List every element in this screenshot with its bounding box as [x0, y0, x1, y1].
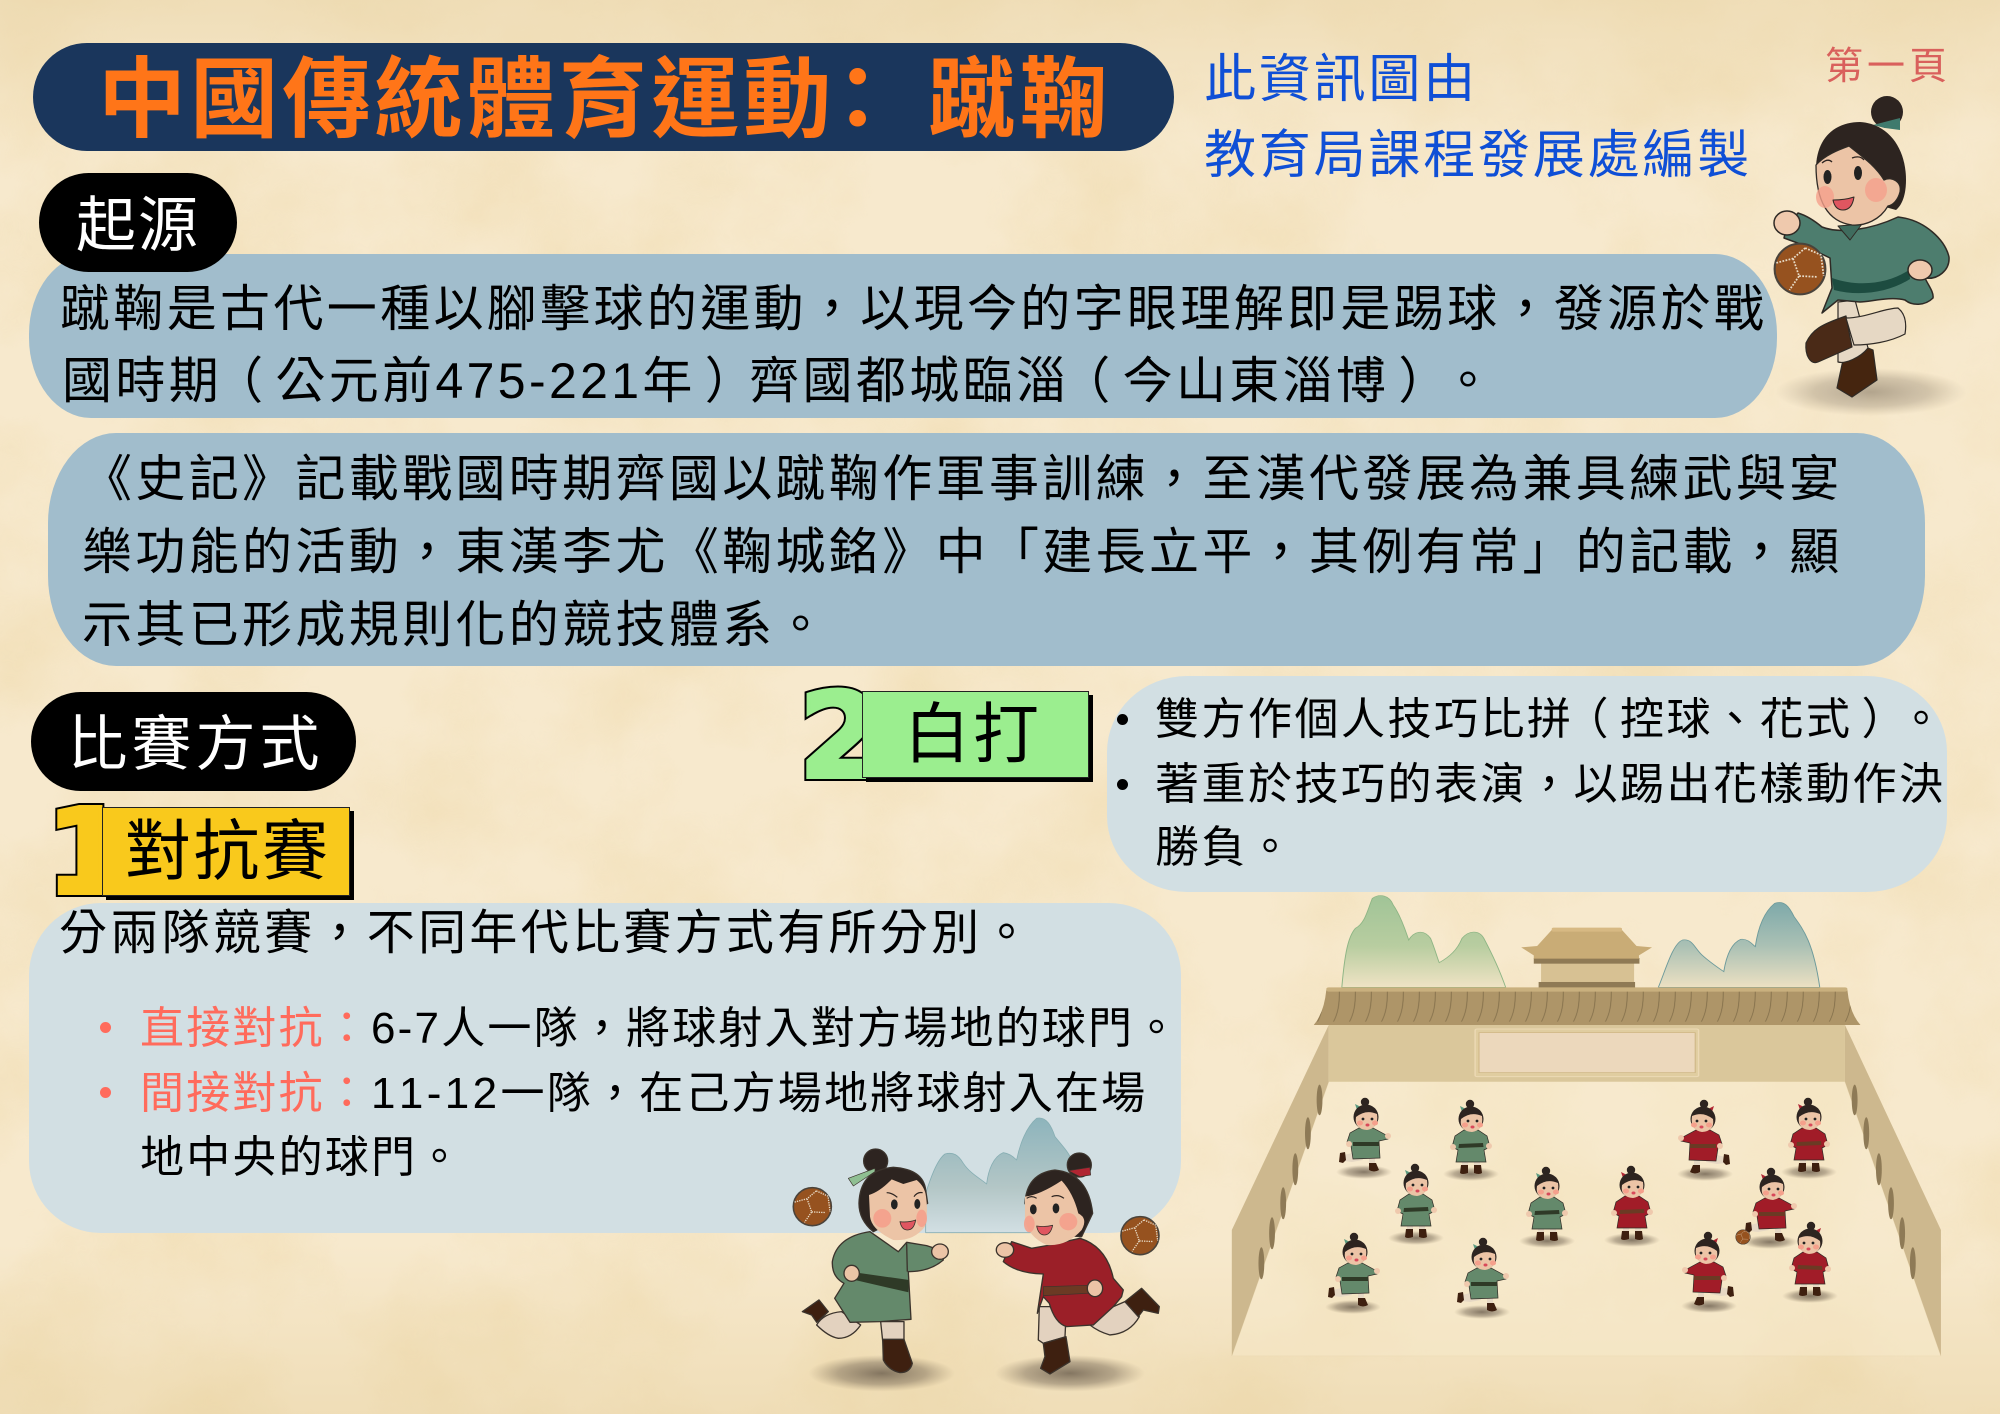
confrontation bullets: 直接對抗：6-7人一隊，將球射入對方場地的球門。: [140, 1004, 1180, 1053]
confrontation bullets: [100, 1004, 1180, 1182]
confrontation bullets: 地中央的球門。: [140, 1133, 463, 1182]
illustration: right shadow: [995, 1355, 1145, 1392]
illustration: green team: [1325, 1098, 1575, 1319]
origin text: 國時期（公元前475-221年）齊國都城臨淄（今山東淄博）。: [62, 353, 1496, 409]
confrontation intro text: 分兩隊競賽，不同年代比賽方式有所分別。: [59, 907, 1034, 960]
heading: origin: 起源: [76, 192, 200, 259]
badge: number 2: 2: [799, 667, 881, 805]
solo play bullets: 雙方作個人技巧比拼（控球、花式）。: [1155, 695, 1946, 744]
history text: 《史記》記載戰國時期齊國以蹴鞠作軍事訓練，至漢代發展為兼具練武與宴: [82, 451, 1843, 507]
panel: history: [48, 433, 1925, 666]
history text: 樂功能的活動，東漢李尤《鞠城銘》中「建長立平，其例有常」的記載，顯: [82, 524, 1843, 580]
heading: match formats: [31, 692, 356, 791]
subheading: solo play: [862, 691, 1089, 778]
illustration: kicking boy with ball: [1774, 96, 1967, 416]
title text: 中國傳統體育運動：蹴鞠: [98, 29, 1112, 156]
illustration: left ball: [793, 1188, 831, 1226]
history text: 示其已形成規則化的競技體系。: [82, 597, 829, 653]
credit text: 此資訊圖由: [1204, 51, 1478, 109]
illustration: green mountains: [1342, 896, 1506, 987]
illustration: right ball: [1121, 1217, 1159, 1255]
solo play bullets: 著重於技巧的表演，以踢出花樣動作決: [1155, 760, 1946, 809]
illustration: right wall: [1845, 1025, 1941, 1356]
illustration: left wall: [1232, 1025, 1329, 1356]
illustration: left shadow: [808, 1355, 955, 1392]
title banner: [33, 43, 1174, 151]
illustration: teal mountains: [926, 1118, 1082, 1233]
illustration: red player: [996, 1153, 1159, 1374]
panel: origin intro: [29, 254, 1777, 418]
panel: confrontation match: [29, 903, 1181, 1233]
illustration: wall niches: [1258, 1085, 1916, 1279]
subheading: confrontation match: [102, 807, 350, 896]
badge: number 1: 1: [46, 783, 128, 921]
illustration: court floor: [1232, 1082, 1941, 1356]
illustration: back wall: [1329, 1025, 1845, 1082]
origin text: [60, 281, 1767, 409]
badge: number 2: 2: [799, 667, 881, 805]
illustration: pavilion: [1521, 928, 1652, 988]
illustration: court with wall and pavilion: [1232, 896, 1941, 1356]
subheading: confrontation match: 對抗賽: [125, 814, 330, 888]
confrontation bullets: 間接對抗：11-12一隊，在己方場地將球射入在場: [140, 1069, 1147, 1118]
illustration: green player: [802, 1149, 948, 1373]
solo play bullets: [1117, 695, 1946, 872]
badge: number 1: 1: [46, 783, 128, 921]
origin text: 蹴鞠是古代一種以腳擊球的運動，以現今的字眼理解即是踢球，發源於戰: [60, 281, 1767, 337]
credit text: [1204, 51, 1752, 185]
illustration: plaque: [1475, 1029, 1699, 1077]
subheading: solo play: 白打: [904, 697, 1042, 771]
solo play bullets: 勝負。: [1155, 823, 1294, 872]
page label: 第一頁: [1825, 46, 1951, 88]
illustration: roof: [1314, 987, 1860, 1025]
illustration: red team: [1604, 1098, 1838, 1313]
heading: match formats: 比賽方式: [68, 711, 324, 778]
heading: origin: [39, 173, 237, 272]
illustration: teal court mountains: [1658, 902, 1820, 987]
panel: solo play: [1107, 676, 1947, 892]
illustration: two players in foreground: [793, 1118, 1159, 1392]
history text: [82, 451, 1843, 653]
credit text: 教育局課程發展處編製: [1204, 127, 1752, 185]
